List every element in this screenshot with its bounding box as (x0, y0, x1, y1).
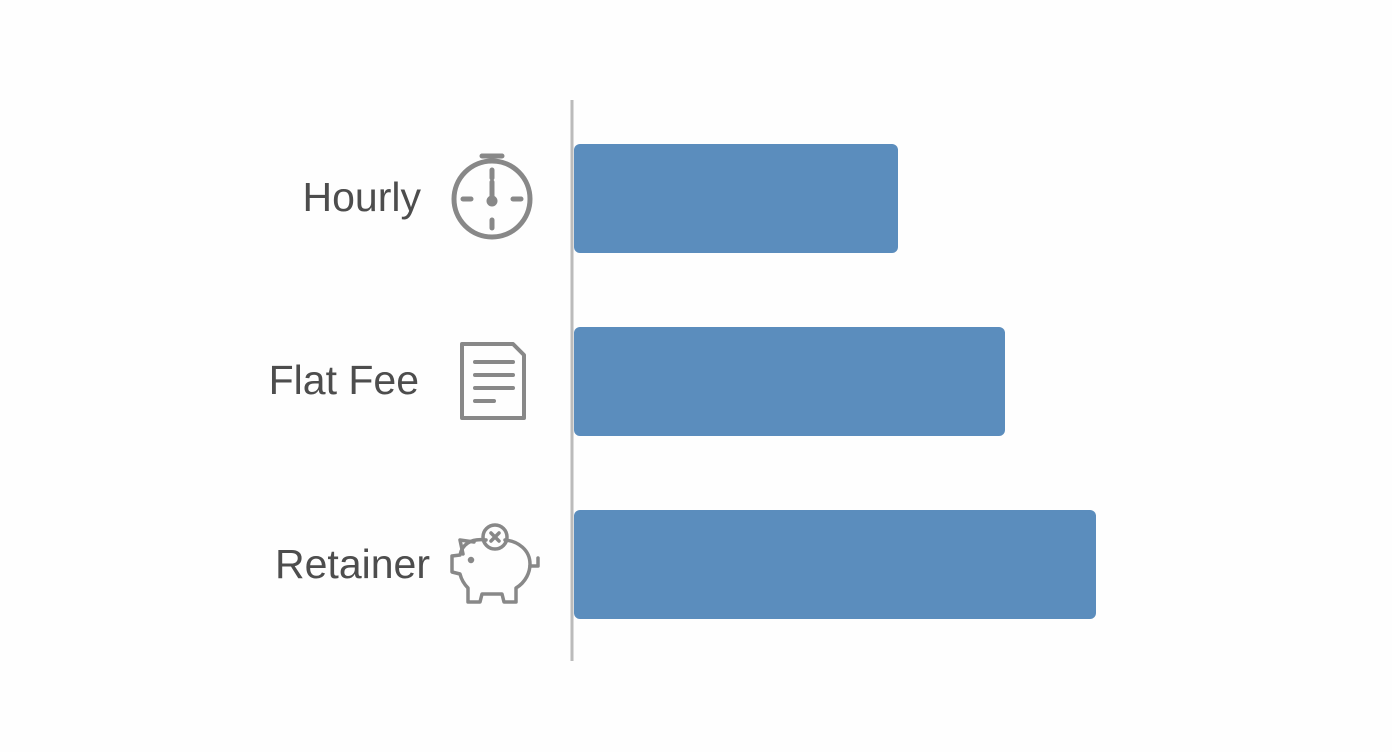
icon: stopwatch (454, 156, 530, 237)
bar: Retainer (574, 510, 1096, 619)
label: Retainer: Retainer (275, 541, 430, 587)
axis line (570, 100, 574, 661)
bar: Hourly (574, 144, 898, 253)
icon: document (462, 344, 524, 418)
row: Hourly (303, 144, 898, 253)
bar: Flat Fee (574, 327, 1005, 436)
row: Flat Fee (269, 327, 1005, 436)
icon: piggy bank (452, 525, 538, 602)
label: Hourly: Hourly (303, 174, 421, 220)
row: Retainer (275, 510, 1096, 619)
label: Flat Fee: Flat Fee (269, 357, 419, 403)
